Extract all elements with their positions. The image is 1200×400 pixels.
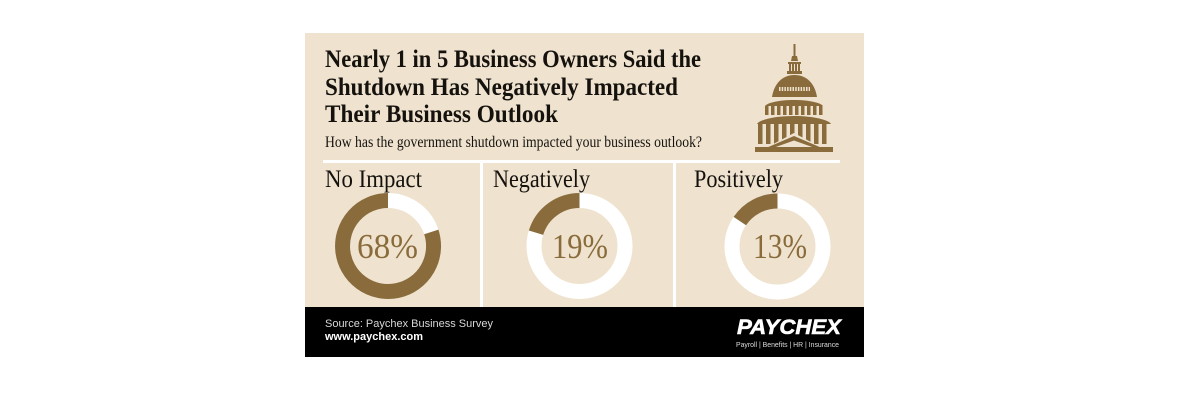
source text: www.paychex.com — [324, 331, 423, 343]
heading: positively: Positively — [694, 166, 783, 193]
panel: background — [305, 33, 864, 307]
donut chart: 68% — [342, 200, 434, 292]
source text — [324, 318, 493, 343]
icon: capitol building — [755, 44, 833, 152]
heading: negatively: Negatively — [493, 166, 590, 193]
panel: negatively — [493, 166, 625, 292]
footer bar — [305, 307, 864, 357]
title: Shutdown Has Negatively Impacted — [325, 74, 678, 101]
donut chart: 19% — [534, 200, 625, 292]
title: Their Business Outlook — [325, 101, 558, 128]
subtitle question: How has the government shutdown impacted your business outlook? — [325, 134, 702, 151]
panel: no impact — [325, 166, 434, 292]
title: Nearly 1 in 5 Business Owners Said the — [325, 46, 701, 73]
value: 13%: 13% — [753, 227, 807, 266]
value: 19%: 19% — [552, 227, 608, 266]
value: 68%: 68% — [357, 227, 418, 266]
divider lines — [323, 160, 840, 307]
title — [325, 46, 701, 128]
source text: Source: Paychex Business Survey — [325, 318, 493, 330]
logo: paychex: Payroll | Benefits | HR | Insurance — [736, 340, 839, 349]
logo: paychex — [736, 316, 843, 349]
logo: paychex: PAYCHEX — [737, 316, 843, 339]
heading: no impact: No Impact — [325, 166, 422, 193]
panel: positively — [694, 166, 823, 292]
donut chart: 13% — [732, 201, 823, 292]
